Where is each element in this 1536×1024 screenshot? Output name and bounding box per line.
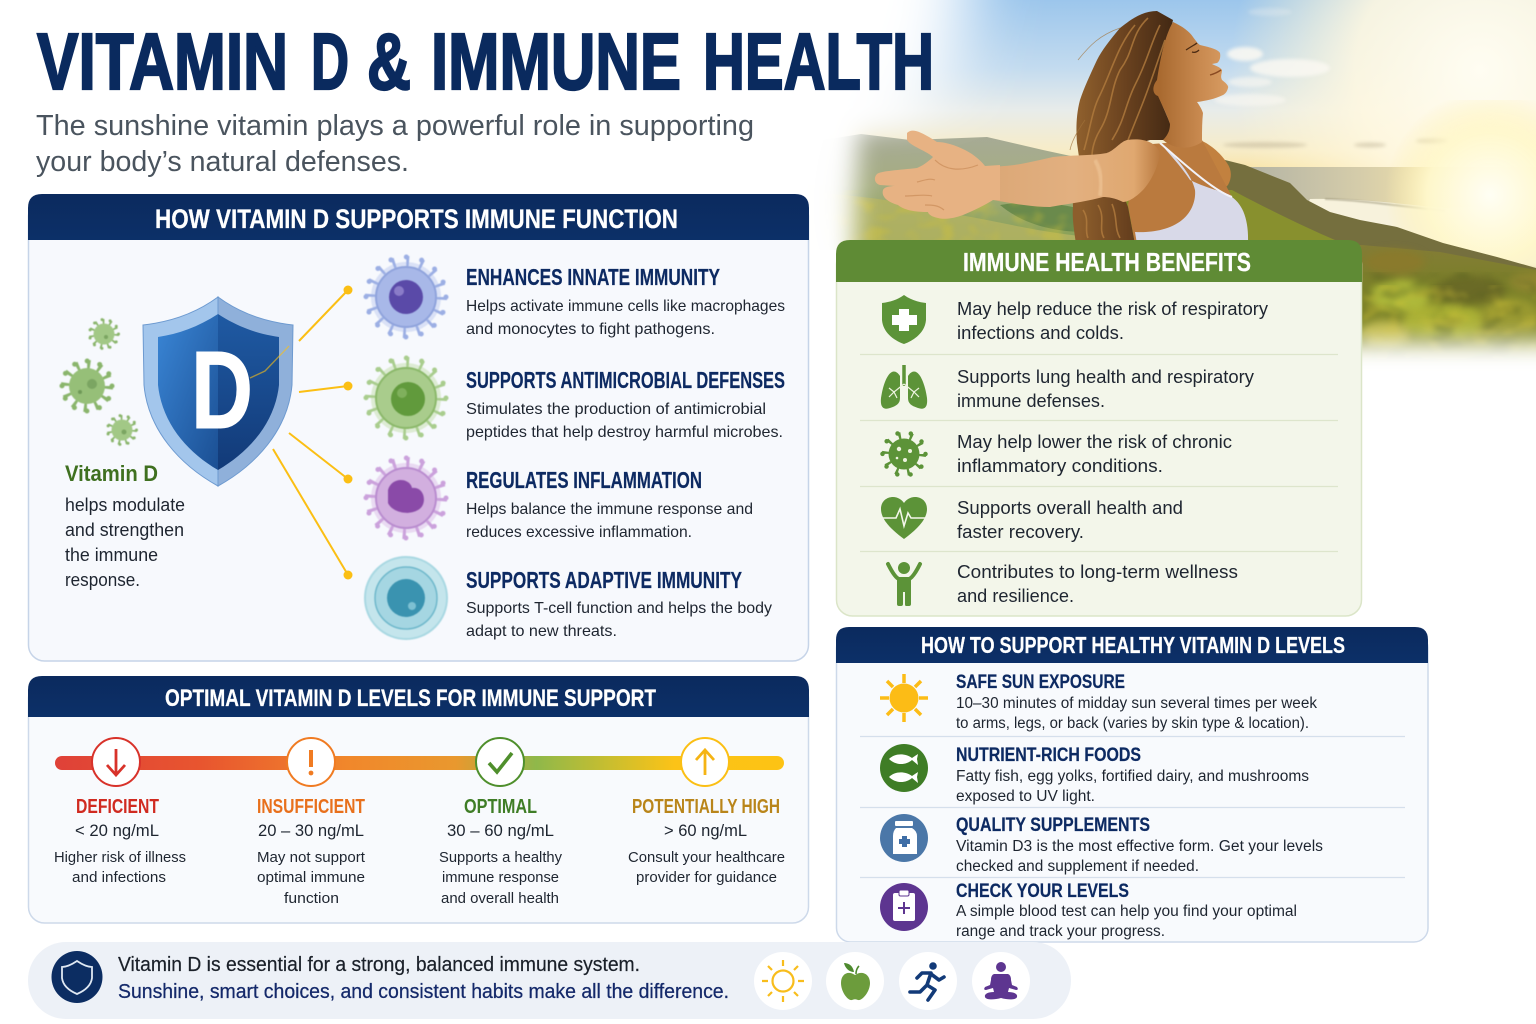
icon: blue cell	[366, 257, 446, 337]
icon: green cell	[366, 358, 446, 438]
item: supports adaptive immunity: Supports T-cell function and helps the body	[466, 600, 772, 617]
connector lines	[250, 286, 352, 580]
tip: nutrient-rich foods: exposed to UV light.	[956, 788, 1095, 805]
benefit: recovery	[881, 497, 1183, 542]
item: supports antimicrobial defenses	[366, 358, 785, 441]
tip: nutrient-rich foods	[880, 744, 1309, 805]
tip: quality supplements: checked and supplement if needed.	[956, 858, 1199, 875]
hero photo: woman with outstretched arms on sunny coast	[833, 0, 1536, 362]
tip: safe sun exposure: to arms, legs, or back (varies by skin type & location).	[956, 715, 1309, 732]
item: regulates inflammation: Helps balance the immune response and	[466, 501, 753, 518]
item: supports adaptive immunity: adapt to new threats.	[466, 623, 617, 640]
level: insufficient: May not support	[257, 849, 366, 866]
benefit: chronic inflammation	[882, 431, 1232, 476]
title: HEALTH	[703, 17, 934, 106]
panel: optimal vitamin D levels	[28, 676, 809, 923]
level gradient bar	[55, 756, 784, 770]
panel heading	[28, 194, 809, 240]
panel heading	[836, 627, 1428, 663]
level: deficient: DEFICIENT	[76, 796, 159, 818]
panel heading: HOW VITAMIN D SUPPORTS IMMUNE FUNCTION	[155, 204, 678, 234]
icon: small viruses	[62, 320, 136, 444]
benefit: lung health: immune defenses.	[957, 390, 1105, 411]
item: supports antimicrobial defenses: Stimulates the production of antimicrobial	[466, 401, 766, 418]
level: optimal: and overall health	[441, 890, 559, 907]
tip: nutrient-rich foods: Fatty fish, egg yolks, fortified dairy, and mushrooms	[956, 768, 1309, 785]
level: optimal: Supports a healthy	[439, 849, 562, 866]
item: supports antimicrobial defenses: SUPPORTS ANTIMICROBIAL DEFENSES	[466, 367, 785, 393]
level: potentially high: POTENTIALLY HIGH	[632, 796, 780, 818]
item: supports adaptive immunity: SUPPORTS ADAPTIVE IMMUNITY	[466, 567, 742, 593]
panel: how vitamin D supports immune function	[28, 194, 809, 661]
item: enhances innate immunity: and monocytes to fight pathogens.	[466, 321, 715, 338]
level: insufficient: 20 – 30 ng/mL	[258, 821, 364, 840]
level: insufficient: INSUFFICIENT	[257, 796, 365, 818]
benefit: lung health	[881, 365, 1255, 411]
title	[37, 17, 934, 106]
item: regulates inflammation	[366, 458, 753, 541]
panel: how to support healthy vitamin D levels	[836, 627, 1428, 942]
level: deficient: < 20 ng/mL	[75, 821, 159, 840]
level: potentially high: Consult your healthcare	[628, 849, 785, 866]
tip: safe sun exposure: SAFE SUN EXPOSURE	[956, 672, 1125, 693]
level: optimal: immune response	[442, 869, 559, 886]
tip: quality supplements: Vitamin D3 is the most effective form. Get your levels	[956, 838, 1323, 855]
icon: lungs	[881, 365, 927, 409]
level: deficient	[54, 738, 186, 886]
footer banner	[28, 942, 1071, 1019]
item: supports antimicrobial defenses: peptides that help destroy harmful microbes.	[466, 424, 783, 441]
icon: footer shield	[52, 951, 102, 1003]
vitamin D caption: Vitamin D	[65, 461, 158, 486]
tip: quality supplements: QUALITY SUPPLEMENTS	[956, 815, 1150, 836]
subtitle: your body’s natural defenses.	[36, 146, 409, 178]
icon: person with raised arms	[888, 562, 920, 606]
benefit: respiratory infections: infections and colds.	[957, 322, 1124, 343]
item: supports adaptive immunity	[365, 557, 772, 640]
item: regulates inflammation: reduces excessive inflammation.	[466, 524, 692, 541]
benefit: chronic inflammation: May help lower the risk of chronic	[957, 431, 1232, 452]
subtitle: The sunshine vitamin plays a powerful role in supporting	[36, 110, 754, 142]
item: enhances innate immunity: Helps activate immune cells like macrophages	[466, 298, 785, 315]
benefit: long-term wellness: and resilience.	[957, 585, 1074, 606]
panel heading: HOW TO SUPPORT HEALTHY VITAMIN D LEVELS	[921, 632, 1345, 658]
icon: apple	[826, 952, 884, 1010]
benefit: long-term wellness: Contributes to long-term wellness	[957, 561, 1238, 582]
benefit: chronic inflammation: inflammatory conditions.	[957, 455, 1163, 476]
benefit: respiratory infections	[882, 295, 1269, 344]
item: enhances innate immunity: ENHANCES INNATE IMMUNITY	[466, 264, 720, 290]
level: potentially high: provider for guidance	[636, 869, 777, 886]
icon: sun	[754, 952, 812, 1010]
panel heading: IMMUNE HEALTH BENEFITS	[963, 247, 1251, 277]
footer message: Sunshine, smart choices, and consistent habits make all the difference.	[118, 981, 729, 1003]
tip: check your levels	[880, 881, 1297, 940]
tip: check your levels: A simple blood test can help you find your optimal	[956, 903, 1297, 920]
tip: check your levels: range and track your progress.	[956, 923, 1165, 940]
item: enhances innate immunity	[366, 257, 785, 338]
benefit: long-term wellness	[888, 561, 1238, 606]
subtitle	[36, 110, 754, 178]
level: potentially high	[628, 738, 785, 886]
tip: safe sun exposure	[880, 672, 1317, 732]
vitamin D caption: the immune	[65, 545, 158, 565]
benefit: respiratory infections: May help reduce the risk of respiratory	[957, 298, 1269, 319]
title: &	[367, 17, 411, 106]
tip: safe sun exposure: 10–30 minutes of midday sun several times per week	[956, 695, 1317, 712]
level: deficient: Higher risk of illness	[54, 849, 186, 866]
level: insufficient	[257, 738, 366, 907]
level: optimal: OPTIMAL	[464, 796, 537, 818]
icon: fish	[880, 744, 928, 792]
level: insufficient: optimal immune	[257, 869, 365, 886]
icon: heart with pulse	[881, 497, 927, 539]
title: VITAMIN	[37, 17, 288, 106]
vitamin D caption: and strengthen	[65, 520, 184, 540]
icon: vitamin D shield: D	[191, 329, 253, 452]
panel heading	[28, 676, 809, 717]
icon: shield with cross	[882, 295, 926, 344]
tip: quality supplements	[880, 814, 1323, 875]
footer message: Vitamin D is essential for a strong, balanced immune system.	[118, 954, 640, 976]
panel heading	[836, 240, 1362, 282]
icon: purple cell	[366, 458, 446, 538]
title: IMMUNE	[431, 17, 681, 106]
item: regulates inflammation: REGULATES INFLAMMATION	[466, 467, 702, 493]
icon: vitamin D shield	[143, 297, 293, 486]
level: potentially high: > 60 ng/mL	[664, 821, 747, 840]
title: D	[311, 17, 349, 106]
icon: teal cell	[365, 557, 447, 639]
benefit: recovery: faster recovery.	[957, 521, 1084, 542]
level: deficient: and infections	[72, 869, 166, 886]
level: optimal	[439, 738, 562, 907]
panel heading: OPTIMAL VITAMIN D LEVELS FOR IMMUNE SUPPORT	[165, 685, 656, 712]
icon: virus	[882, 432, 926, 476]
icon: sun	[880, 674, 928, 722]
footer message	[118, 954, 729, 1003]
icon: clipboard	[880, 883, 928, 931]
benefit: recovery: Supports overall health and	[957, 497, 1183, 518]
icon: meditation	[972, 952, 1030, 1010]
icon: runner	[899, 952, 957, 1010]
tip: nutrient-rich foods: NUTRIENT-RICH FOODS	[956, 745, 1141, 766]
woman	[875, 11, 1248, 244]
vitamin D caption: helps modulate	[65, 495, 185, 515]
vitamin D caption	[65, 461, 185, 590]
level: optimal: 30 – 60 ng/mL	[447, 821, 554, 840]
icon: supplement bottle	[880, 814, 928, 862]
tip: check your levels: CHECK YOUR LEVELS	[956, 881, 1129, 902]
benefit: lung health: Supports lung health and respiratory	[957, 366, 1255, 387]
level: insufficient: function	[284, 890, 339, 907]
panel: immune health benefits	[836, 240, 1362, 616]
vitamin D caption: response.	[65, 570, 140, 590]
